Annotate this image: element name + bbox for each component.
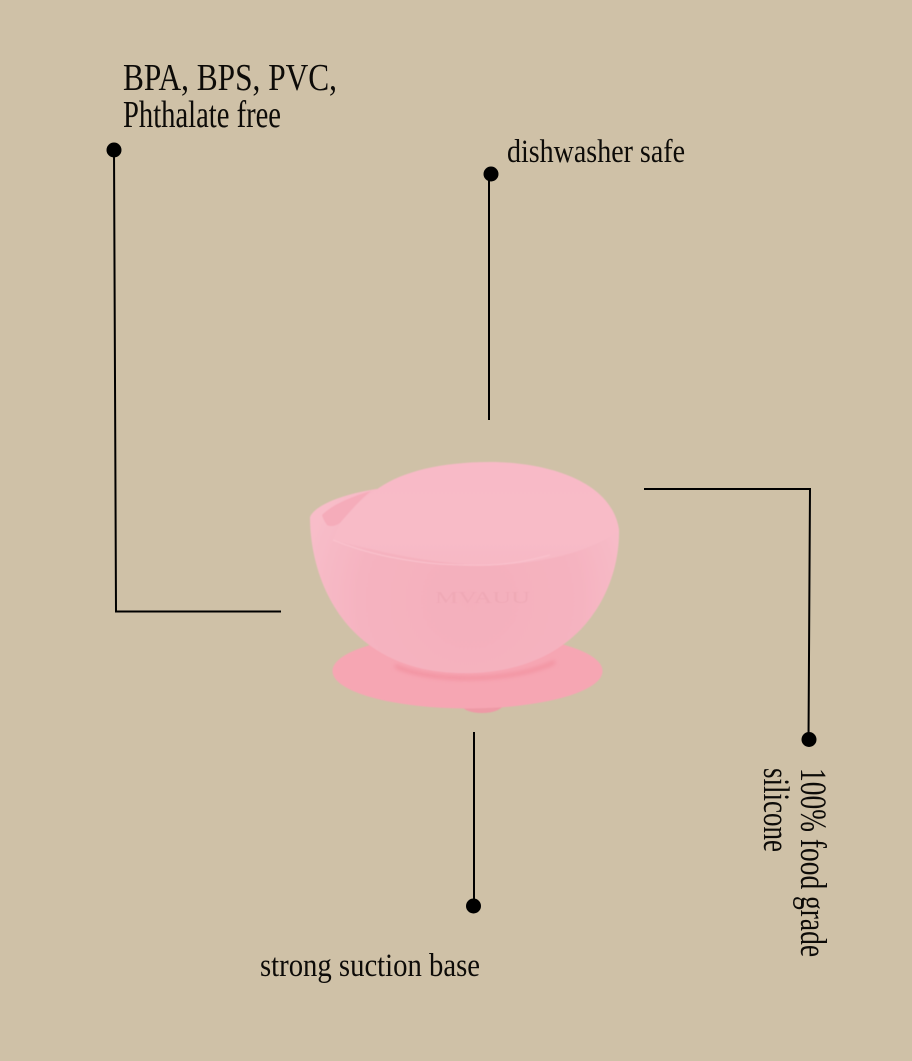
callout: dishwasher safe label: dishwasher safe bbox=[507, 134, 685, 170]
callout: food grade silicone label: silicone bbox=[755, 768, 796, 852]
leader line: BPA free bbox=[106, 142, 281, 612]
bowl body bbox=[310, 489, 619, 673]
bowl shadow on base bbox=[395, 660, 555, 680]
suction base disc bbox=[332, 634, 602, 713]
leader line: dishwasher safe bbox=[484, 166, 498, 420]
leader line: food grade silicone bbox=[644, 489, 816, 747]
callout: food grade silicone label: 100% food grade bbox=[792, 768, 833, 957]
callout: BPA free label: BPA, BPS, PVC, bbox=[123, 57, 337, 99]
lid bbox=[333, 462, 619, 565]
callout: suction base label: strong suction base bbox=[260, 948, 480, 984]
spout recess bbox=[322, 491, 371, 526]
illustration: pink suction bowl bbox=[310, 462, 619, 713]
leader line: suction base bbox=[466, 732, 481, 914]
lid seam bbox=[333, 540, 550, 565]
callout: BPA free label: Phthalate free bbox=[123, 94, 281, 136]
callout: food grade silicone label bbox=[755, 768, 833, 957]
callout: BPA free label bbox=[123, 57, 337, 136]
embossed brand mark: MVAUU bbox=[435, 588, 530, 607]
